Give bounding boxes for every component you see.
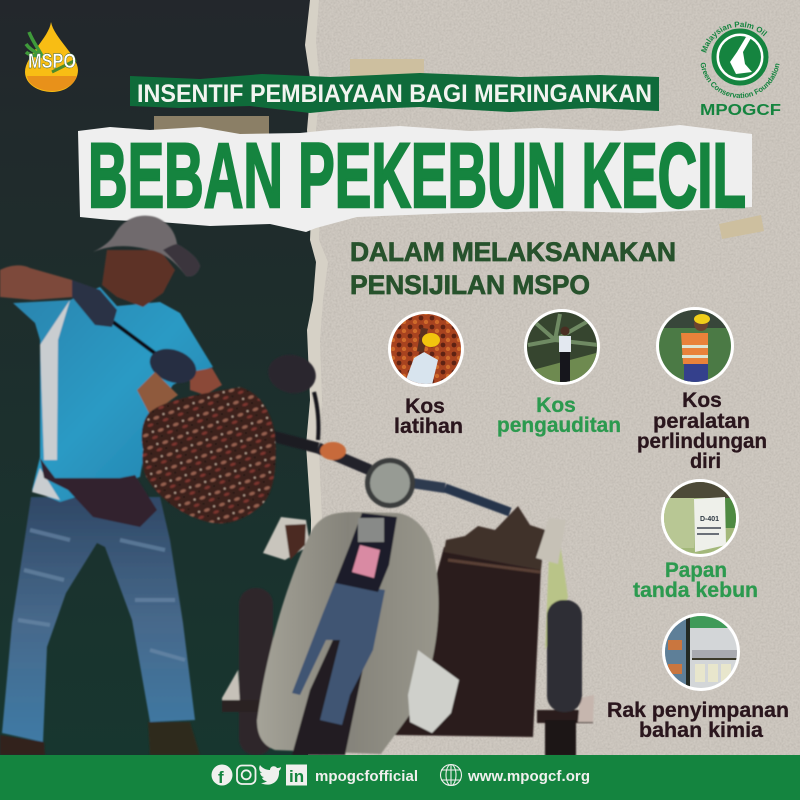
glove left	[72, 280, 117, 327]
cart left bracket	[222, 517, 310, 712]
icon: linkedin	[286, 764, 307, 786]
hem panel	[32, 468, 60, 500]
item: Kos peralatan perlindungan diri: perlindungan	[637, 430, 767, 453]
item: Rak penyimpanan bahan kimia: bahan kimia	[639, 719, 763, 742]
front column	[335, 513, 397, 592]
neck and face	[102, 250, 175, 307]
handle: mpogcfofficial	[315, 768, 418, 785]
mirror	[265, 350, 319, 440]
item: Kos peralatan perlindungan diri: diri	[690, 450, 721, 473]
shirt side panel	[40, 300, 70, 460]
footer bar	[0, 755, 800, 800]
subheading	[350, 237, 676, 300]
icon: twitter	[259, 765, 281, 785]
item: Kos peralatan perlindungan diri	[637, 307, 767, 473]
MPOGCF logo: Green Conservation Foundation	[700, 62, 780, 98]
cart box	[393, 506, 594, 756]
photo: harvester in fruit pile	[388, 311, 464, 387]
MPOGCF logo	[700, 22, 781, 119]
fork	[292, 583, 385, 725]
item: Papan tanda kebun	[633, 479, 758, 602]
logo ring text: Malaysian Palm Oil	[701, 22, 768, 53]
jeans	[2, 497, 195, 742]
item: Kos latihan	[388, 311, 464, 438]
item: Papan tanda kebun: tanda kebun	[633, 579, 758, 602]
item: Kos pengauditan: Kos	[536, 394, 576, 417]
torn paper edge	[300, 0, 328, 760]
subheading: DALAM MELAKSANAKAN	[350, 237, 676, 267]
hat	[93, 216, 200, 277]
fruit bunch	[142, 387, 276, 523]
photo: plot signboard: D-401	[700, 516, 719, 523]
tape: title right	[719, 215, 764, 239]
headlight	[365, 458, 415, 508]
photo: chemical storage rack	[662, 613, 740, 691]
cart wheels	[239, 588, 582, 755]
handlebar	[268, 435, 510, 512]
MSPO logo	[25, 22, 78, 92]
subheading: PENSIJILAN MSPO	[350, 270, 590, 300]
glove right	[145, 343, 201, 389]
heading ribbon	[130, 73, 659, 113]
shirt	[13, 287, 213, 502]
front wheel	[292, 620, 372, 755]
photo: palm oil worker	[0, 216, 276, 755]
sack	[408, 650, 459, 733]
MSPO logo: MSPO	[28, 50, 76, 73]
item: Rak penyimpanan bahan kimia: Rak penyimpanan	[607, 699, 789, 722]
arm	[0, 265, 74, 300]
fender	[257, 512, 439, 754]
icon: facebook: f	[218, 768, 224, 787]
photo: auditor under palm	[524, 309, 600, 385]
item: Kos pengauditan: pengauditan	[497, 414, 621, 437]
photo: scooter with cart	[222, 350, 594, 756]
item: Kos peralatan perlindungan diri: peralatan	[653, 410, 750, 433]
item: Kos latihan: latihan	[394, 415, 463, 438]
MPOGCF logo: MPOGCF	[700, 102, 781, 119]
boots	[0, 722, 200, 755]
icon: globe	[440, 764, 462, 786]
fruit stem	[137, 372, 178, 415]
icon: instagram	[237, 766, 256, 784]
item: Rak penyimpanan bahan kimia	[607, 613, 789, 742]
item: Kos pengauditan	[497, 309, 621, 437]
pole	[113, 322, 160, 357]
icon: linkedin: in	[289, 767, 304, 786]
paper grain	[300, 0, 800, 760]
dark panel	[0, 0, 316, 760]
heading ribbon: INSENTIF PEMBIAYAAN BAGI MERINGANKAN	[137, 80, 652, 108]
website: www.mpogcf.org	[467, 768, 590, 785]
belt bag	[40, 458, 157, 527]
item: Kos latihan: Kos	[405, 395, 445, 418]
far forearm	[190, 368, 222, 395]
tape: title left	[154, 116, 269, 134]
tape: top	[350, 59, 424, 79]
photo: worker in safety vest	[656, 307, 734, 386]
item: Papan tanda kebun: Papan	[665, 559, 727, 582]
icon: facebook	[212, 764, 232, 787]
item: Kos peralatan perlindungan diri: Kos	[682, 389, 722, 412]
